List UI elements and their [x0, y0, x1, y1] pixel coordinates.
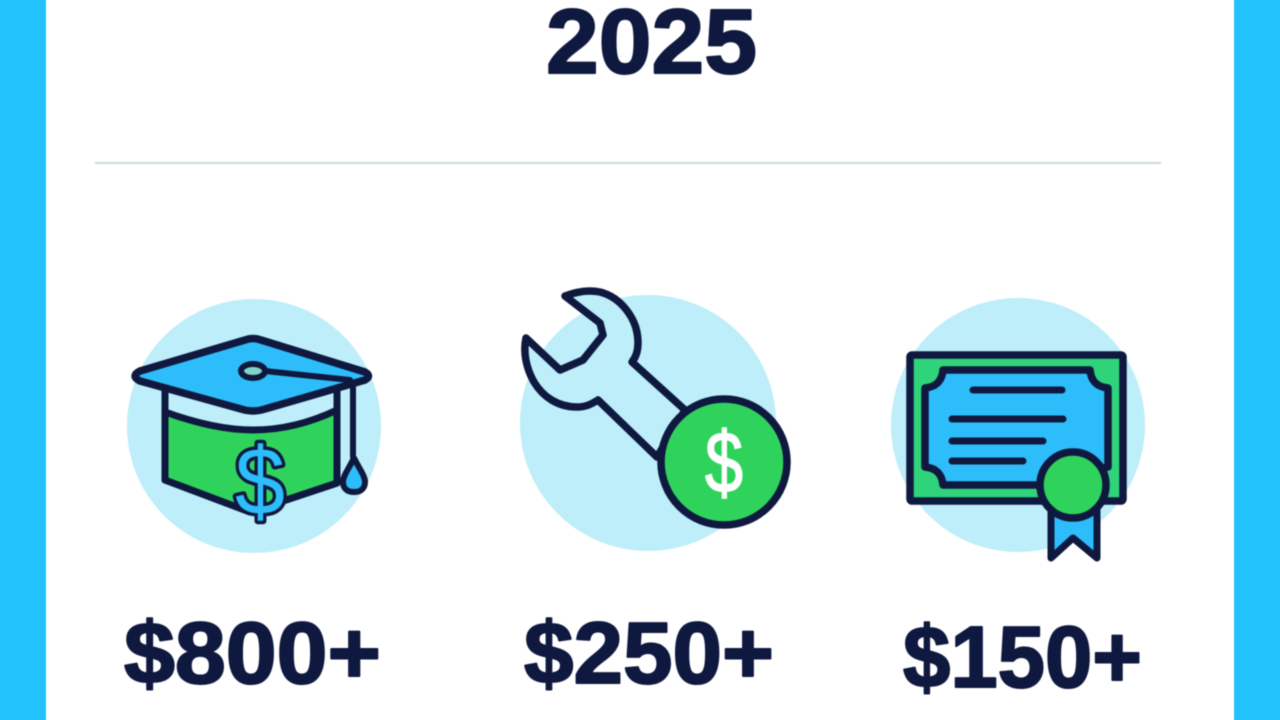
stat: $150+: $150+	[903, 609, 1142, 706]
icon: wrench with dollar coin	[520, 291, 787, 551]
icon: wrench with dollar coin: $	[705, 415, 743, 511]
icon: certificate with ribbon seal	[891, 298, 1145, 558]
icon: graduation cap with dollar sign	[127, 299, 381, 553]
right cyan side band	[1234, 0, 1280, 720]
icon: graduation cap with dollar sign: $	[235, 428, 285, 535]
stat: $250+: $250+	[524, 605, 774, 702]
left cyan side band	[0, 0, 46, 720]
stat: $800+: $800+	[124, 605, 381, 702]
